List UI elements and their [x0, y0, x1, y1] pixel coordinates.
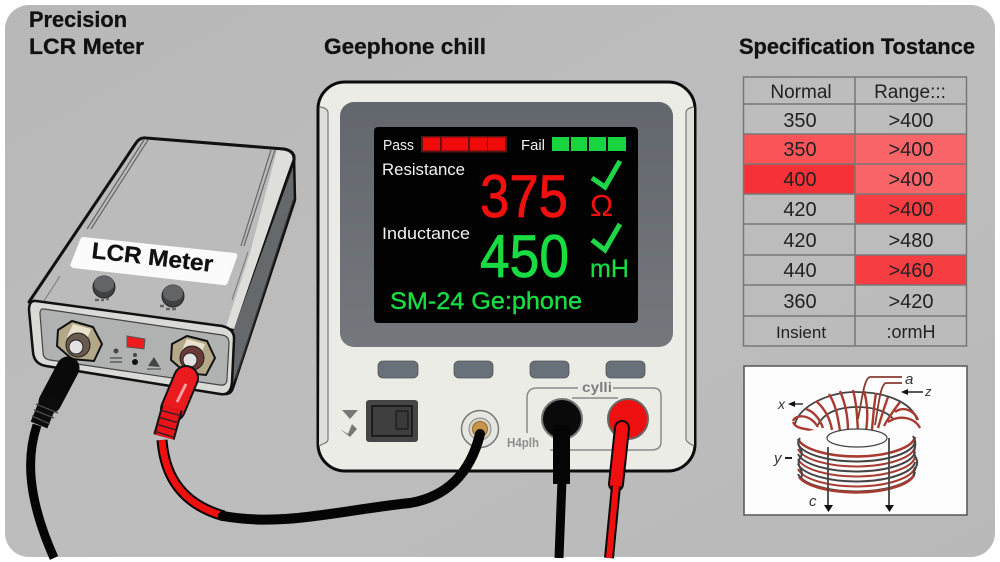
heading: geephone chill: Geephone chill: [324, 34, 486, 59]
connector caption: H4plh: [507, 435, 539, 450]
test lead: red: [154, 378, 224, 516]
check mark: [592, 161, 620, 187]
column: normal: 420: [783, 230, 817, 252]
black socket: [542, 399, 582, 439]
column: range: >420: [888, 291, 934, 313]
light side strips: [226, 150, 292, 329]
column: range: >400: [888, 110, 934, 132]
screen bezel: [340, 102, 673, 347]
resistance value: 375: [480, 163, 568, 230]
ohm unit: Ω: [590, 188, 613, 223]
red terminal nut: [171, 336, 215, 375]
knobs: [93, 276, 184, 309]
black terminal nut: [57, 321, 102, 361]
column: normal: Insient: [776, 323, 826, 342]
column: normal: 420: [783, 199, 817, 221]
title: precision LCR meter: LCR Meter: [29, 34, 144, 59]
table grid: [744, 77, 966, 346]
BNC connector: [462, 410, 498, 448]
red socket: [608, 399, 648, 439]
black probe lead: [559, 425, 562, 558]
column: range: >480: [888, 230, 934, 252]
millihenry unit: mH: [590, 255, 629, 283]
pass indicator: Pass: [383, 138, 414, 154]
toroidal coil diagram: [744, 366, 967, 515]
column: normal: 350: [783, 139, 817, 161]
column: range: >400: [888, 199, 934, 221]
check mark: [592, 224, 620, 250]
title: precision LCR meter: Precision: [29, 7, 127, 32]
coil labels: x: [777, 396, 786, 412]
soft buttons: [378, 361, 645, 378]
coil labels: a: [905, 371, 913, 388]
LCR meter device: [29, 138, 295, 394]
top surface: [29, 138, 294, 330]
column: normal: 400: [783, 169, 817, 191]
title: precision LCR meter: [29, 7, 144, 59]
meter label: [70, 237, 237, 285]
heading: specification tostance: Specification Tostance: [739, 34, 975, 59]
column: normal: [770, 82, 832, 342]
fail indicator: [521, 137, 626, 154]
pass indicator: [383, 136, 507, 154]
resistance label: Resistance: [382, 160, 465, 179]
coil labels: c: [809, 493, 817, 510]
coil labels: z: [924, 384, 932, 399]
fail indicator: Fail: [521, 138, 545, 154]
dark right side: [226, 155, 295, 394]
input bracket: [527, 388, 661, 450]
BNC cable, black section running from red lead: [223, 434, 480, 520]
meter label: LCR Meter: [90, 237, 215, 277]
diagram frame: [744, 366, 967, 515]
coil labels: [773, 371, 932, 510]
LCD display: [374, 127, 638, 323]
highlighted cells: [744, 134, 966, 285]
column: normal: 350: [783, 110, 817, 132]
coil body: [797, 429, 917, 496]
device body: [318, 82, 695, 471]
geophone tester device: [318, 82, 695, 471]
column: normal: 360: [783, 291, 817, 313]
column: range: Range:::: [874, 82, 946, 103]
input caption: cylli: [582, 379, 612, 395]
column: range: >400: [888, 139, 934, 161]
coil side windings: [798, 436, 917, 492]
column: range: >460: [888, 260, 934, 282]
column: range: :ormH: [886, 322, 936, 342]
coil top windings: [793, 390, 920, 432]
front face: [29, 301, 234, 394]
column: normal: Normal: [770, 82, 832, 103]
coil top rings: [795, 392, 917, 425]
inductance label: Inductance: [382, 224, 470, 243]
model label: SM-24 Ge:phone: [390, 288, 582, 315]
column: range: >400: [888, 169, 934, 191]
status LED and symbols: [110, 336, 161, 369]
specification table: [744, 77, 966, 346]
column: normal: 440: [783, 260, 817, 282]
red probe lead: [609, 428, 622, 558]
lead wires: [785, 377, 923, 506]
power switch: [366, 400, 418, 442]
test lead: black: [31, 368, 68, 558]
arrows beside switch: [340, 410, 358, 437]
inductance value: 450: [480, 223, 569, 290]
coil hole: [827, 429, 887, 447]
side grips: [319, 107, 694, 446]
column: range: [874, 82, 946, 342]
arrowheads: [788, 389, 908, 512]
coil labels: y: [773, 450, 783, 467]
